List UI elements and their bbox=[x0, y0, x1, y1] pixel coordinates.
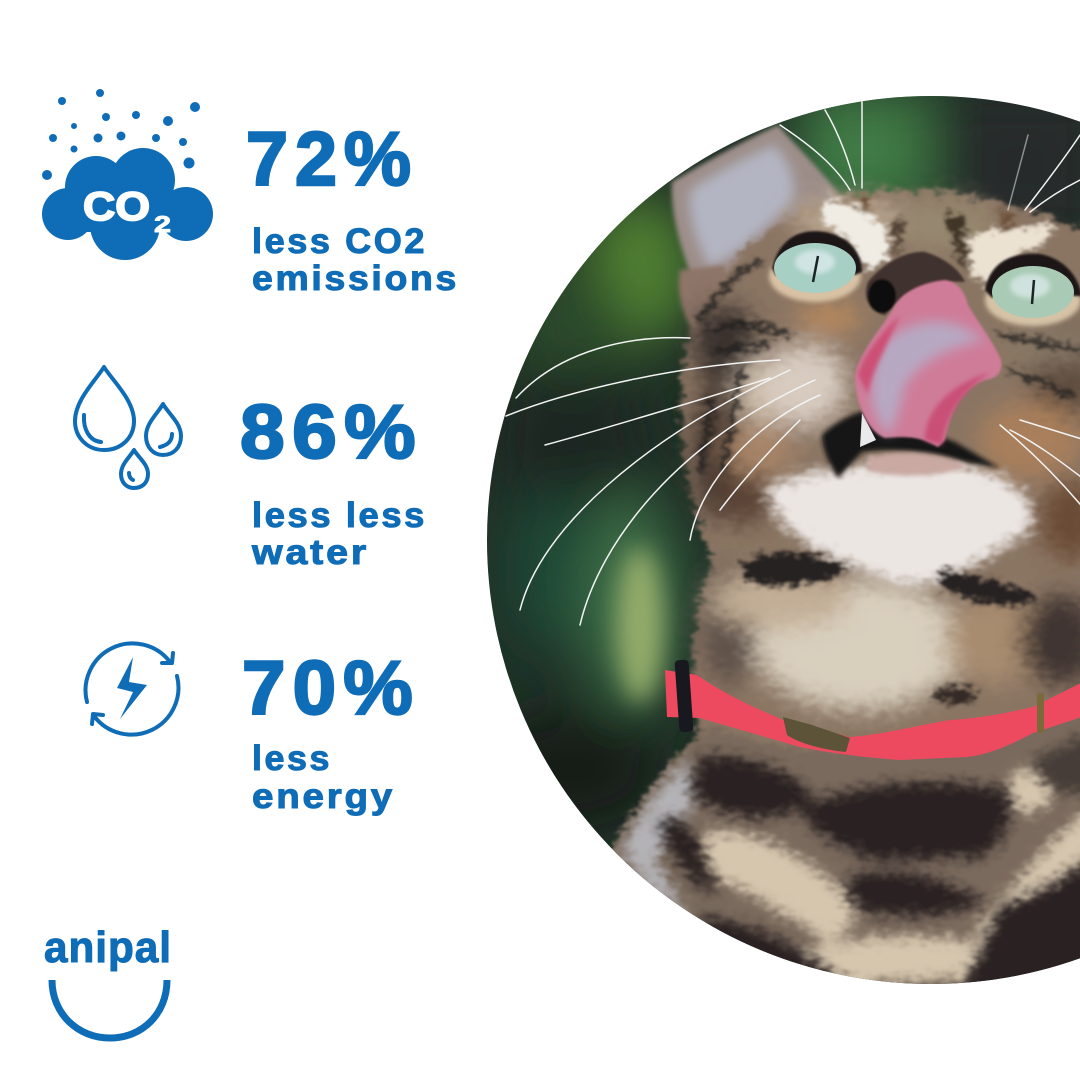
logo: anipal bbox=[44, 923, 172, 1038]
head and neck base bbox=[611, 183, 1080, 850]
face dark streaks bbox=[700, 260, 1080, 470]
cat collar bbox=[665, 660, 1080, 760]
label: less CO2 emissions: less CO2 bbox=[252, 222, 427, 261]
stat: 86% less water bbox=[75, 367, 427, 572]
stat: 70% less energy bbox=[86, 643, 420, 816]
cat tooth bbox=[860, 413, 876, 447]
photo background foliage bbox=[480, 90, 1080, 990]
chest cream chevrons bbox=[705, 768, 1080, 985]
label: less less water: less less bbox=[252, 496, 427, 535]
chest base bbox=[612, 718, 1080, 984]
icon: energy cycle bbox=[86, 643, 178, 735]
face shading bbox=[691, 198, 1080, 710]
logo: anipal: anipal bbox=[44, 923, 172, 972]
cat nose bbox=[866, 252, 965, 315]
value: 72%: 72% bbox=[246, 117, 418, 202]
label: less less water: water bbox=[251, 533, 369, 572]
stat: 72% less CO2 emissions bbox=[42, 89, 459, 298]
icon: CO2 cloud: CO bbox=[83, 185, 150, 229]
chest dark markings bbox=[660, 730, 1080, 995]
photo: cat licking its nose, circular crop bbox=[480, 90, 1080, 1000]
value: 70%: 70% bbox=[242, 646, 420, 731]
icon: CO2 cloud: 2 bbox=[154, 211, 171, 237]
icon: water drops bbox=[75, 367, 181, 488]
cat whiskers bbox=[506, 100, 1080, 625]
cat ear bbox=[672, 125, 840, 335]
value: 86%: 86% bbox=[240, 390, 423, 475]
cat fur: head, neck and chest bbox=[600, 190, 1080, 1000]
chin white bbox=[765, 463, 1032, 586]
cat eye: left bbox=[769, 231, 862, 302]
cat tongue bbox=[855, 280, 1001, 447]
cat lower lip bbox=[868, 452, 968, 476]
icon: CO2 cloud bbox=[42, 89, 213, 260]
label: less CO2 emissions: emissions bbox=[252, 259, 459, 298]
forehead stripes bbox=[822, 195, 1052, 288]
cat mouth bbox=[822, 410, 1000, 478]
neck tabby stripes bbox=[742, 553, 1040, 704]
label: less energy: less bbox=[252, 739, 332, 778]
cat eye: right bbox=[985, 254, 1080, 326]
label: less energy: energy bbox=[252, 777, 395, 816]
